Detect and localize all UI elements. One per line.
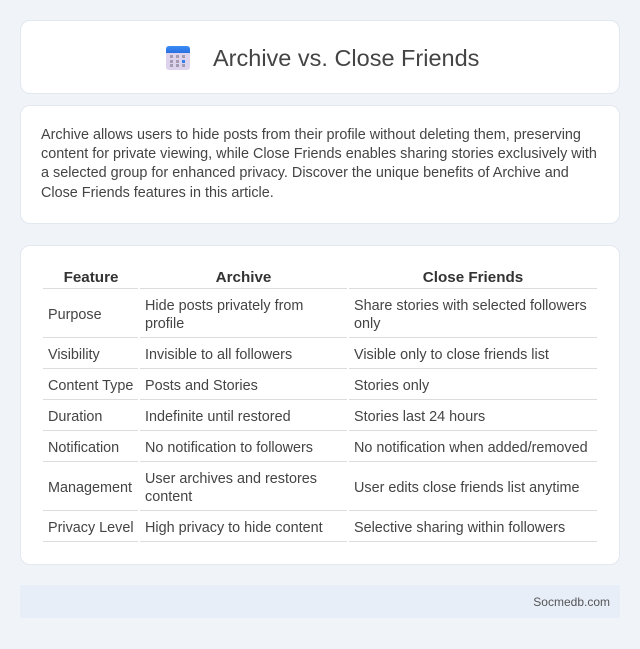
row: Purpose: Purpose — [48, 307, 102, 323]
row: Visibility: Visible only to close friends list — [354, 347, 549, 363]
row: Management: Management — [48, 480, 132, 496]
table header: Close Friends — [423, 269, 523, 286]
row: Content Type: Stories only — [354, 378, 429, 394]
table header: Archive — [216, 269, 271, 286]
row: Purpose: Hide posts privately from — [145, 298, 303, 314]
row: Visibility — [48, 347, 549, 363]
panel: title card — [20, 20, 620, 94]
row: Management — [48, 471, 580, 505]
table header: Feature — [64, 269, 118, 286]
intro paragraph: a selected group for enhanced privacy. Discover the unique benefits of Archive and — [41, 165, 569, 181]
row: Content Type — [48, 378, 430, 394]
row: Purpose: Share stories with selected followers — [354, 298, 587, 314]
footer text: Socmedb.com — [533, 595, 610, 609]
icon: calendar — [166, 46, 190, 70]
intro paragraph: Close Friends features in this article. — [41, 185, 274, 201]
intro paragraph: content for private viewing, while Close Friends enables sharing stories exclusively with — [41, 146, 597, 162]
intro paragraph — [41, 127, 597, 201]
row: Visibility: Invisible to all followers — [145, 347, 292, 363]
panel: comparison table — [20, 245, 620, 565]
row: Notification: No notification when added/removed — [354, 440, 588, 456]
row: Management: content — [145, 489, 192, 505]
row: Duration: Stories last 24 hours — [354, 409, 485, 425]
panel: intro text — [20, 105, 620, 224]
footer bar — [20, 585, 620, 618]
row: Notification — [48, 440, 588, 456]
row: Management: User archives and restores — [145, 471, 317, 487]
row: Purpose: profile — [145, 316, 184, 332]
row: Privacy Level: High privacy to hide content — [145, 520, 323, 536]
row: Privacy Level — [48, 520, 565, 536]
row: Content Type: Content Type — [48, 378, 133, 394]
row: Privacy Level: Selective sharing within followers — [354, 520, 565, 536]
intro paragraph: Archive allows users to hide posts from their profile without deleting them, preserving — [41, 127, 581, 143]
row: Duration — [48, 409, 485, 425]
row: Duration: Indefinite until restored — [145, 409, 291, 425]
row: Purpose — [48, 298, 587, 332]
row: Purpose: only — [354, 316, 380, 332]
row: Notification: Notification — [48, 440, 119, 456]
row: Content Type: Posts and Stories — [145, 378, 258, 394]
table header — [64, 269, 523, 286]
row: Privacy Level: Privacy Level — [48, 520, 134, 536]
row: Visibility: Visibility — [48, 347, 100, 363]
row: Management: User edits close friends list anytime — [354, 480, 580, 496]
title: Archive vs. Close Friends — [213, 45, 479, 71]
row: Notification: No notification to followers — [145, 440, 313, 456]
row: Duration: Duration — [48, 409, 102, 425]
